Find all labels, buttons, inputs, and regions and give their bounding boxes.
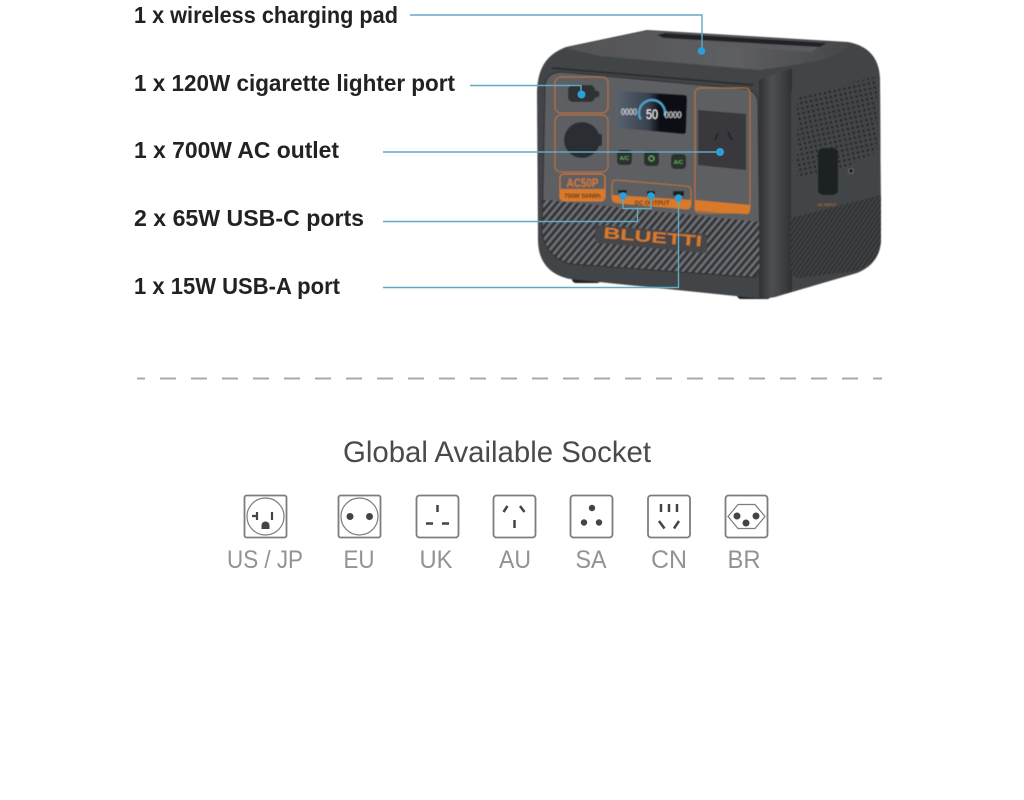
side panel (790, 71, 881, 278)
LCD display: 0000 (621, 107, 637, 117)
socket icon: EU (338, 496, 380, 538)
socket: AU (494, 496, 536, 574)
DC output group: DC OUTPUT (634, 201, 670, 207)
BLUETTI logo plate: BLUETTI (603, 225, 703, 251)
socket: BR (726, 496, 768, 574)
rubber feet (572, 274, 771, 299)
feature label: USB-A port: 1 x 15W USB-A port (134, 273, 340, 299)
leader line: USB-C ports (383, 192, 655, 222)
section heading: Global Available Socket (343, 436, 652, 469)
socket: SA (570, 496, 612, 574)
feature label: cigarette lighter port: 1 x 120W cigarette lighter port (134, 70, 455, 96)
LCD display: 0000 (664, 110, 682, 120)
socket icon: UK (416, 496, 458, 538)
model badge: AC50P (566, 178, 599, 190)
socket: US / JP (227, 496, 303, 574)
socket icon: CN (648, 496, 690, 538)
AC outlet (695, 88, 750, 214)
feature label: AC outlet: 1 x 700W AC outlet (134, 137, 339, 163)
feature label: wireless charging pad: 1 x wireless charging pad (134, 2, 398, 28)
control buttons: A/C (620, 156, 629, 162)
socket name: CN: CN (651, 546, 687, 574)
socket name: BR: BR (728, 546, 760, 574)
LCD display (617, 91, 687, 134)
BLUETTI logo plate (595, 225, 707, 253)
socket icon: US / JP (244, 496, 286, 538)
socket: UK (416, 496, 458, 574)
socket: EU (338, 496, 380, 574)
model badge (560, 174, 605, 201)
socket name: SA: SA (576, 546, 607, 574)
device body (537, 30, 881, 298)
cigarette lighter port (555, 77, 608, 113)
model badge: 700W 504Wh (564, 194, 601, 200)
power station product illustration (530, 30, 881, 299)
control buttons: A/C (674, 160, 683, 166)
corner between front and side (759, 68, 792, 298)
socket name: AU: AU (499, 546, 531, 574)
DC output group (612, 180, 691, 209)
round DC cover (555, 115, 608, 172)
socket icon: BR (726, 496, 768, 538)
front panel (542, 67, 760, 278)
top face with wireless charging pad (566, 31, 850, 70)
socket name: US / JP: US / JP (227, 546, 303, 574)
side panel: AC INPUT (818, 202, 837, 207)
socket name: UK: UK (420, 546, 453, 574)
socket: CN (648, 496, 690, 574)
socket icon: SA (570, 496, 612, 538)
leader line: USB-A port (383, 194, 682, 288)
leader line: wireless charging pad (410, 15, 705, 55)
LCD display: 50 (646, 106, 658, 122)
feature label: USB-C ports: 2 x 65W USB-C ports (134, 205, 364, 231)
leader line: cigarette lighter port (470, 86, 586, 98)
leader line: AC outlet (383, 148, 724, 156)
socket icon: AU (494, 496, 536, 538)
socket name: EU: EU (344, 546, 374, 574)
control buttons (617, 150, 686, 169)
